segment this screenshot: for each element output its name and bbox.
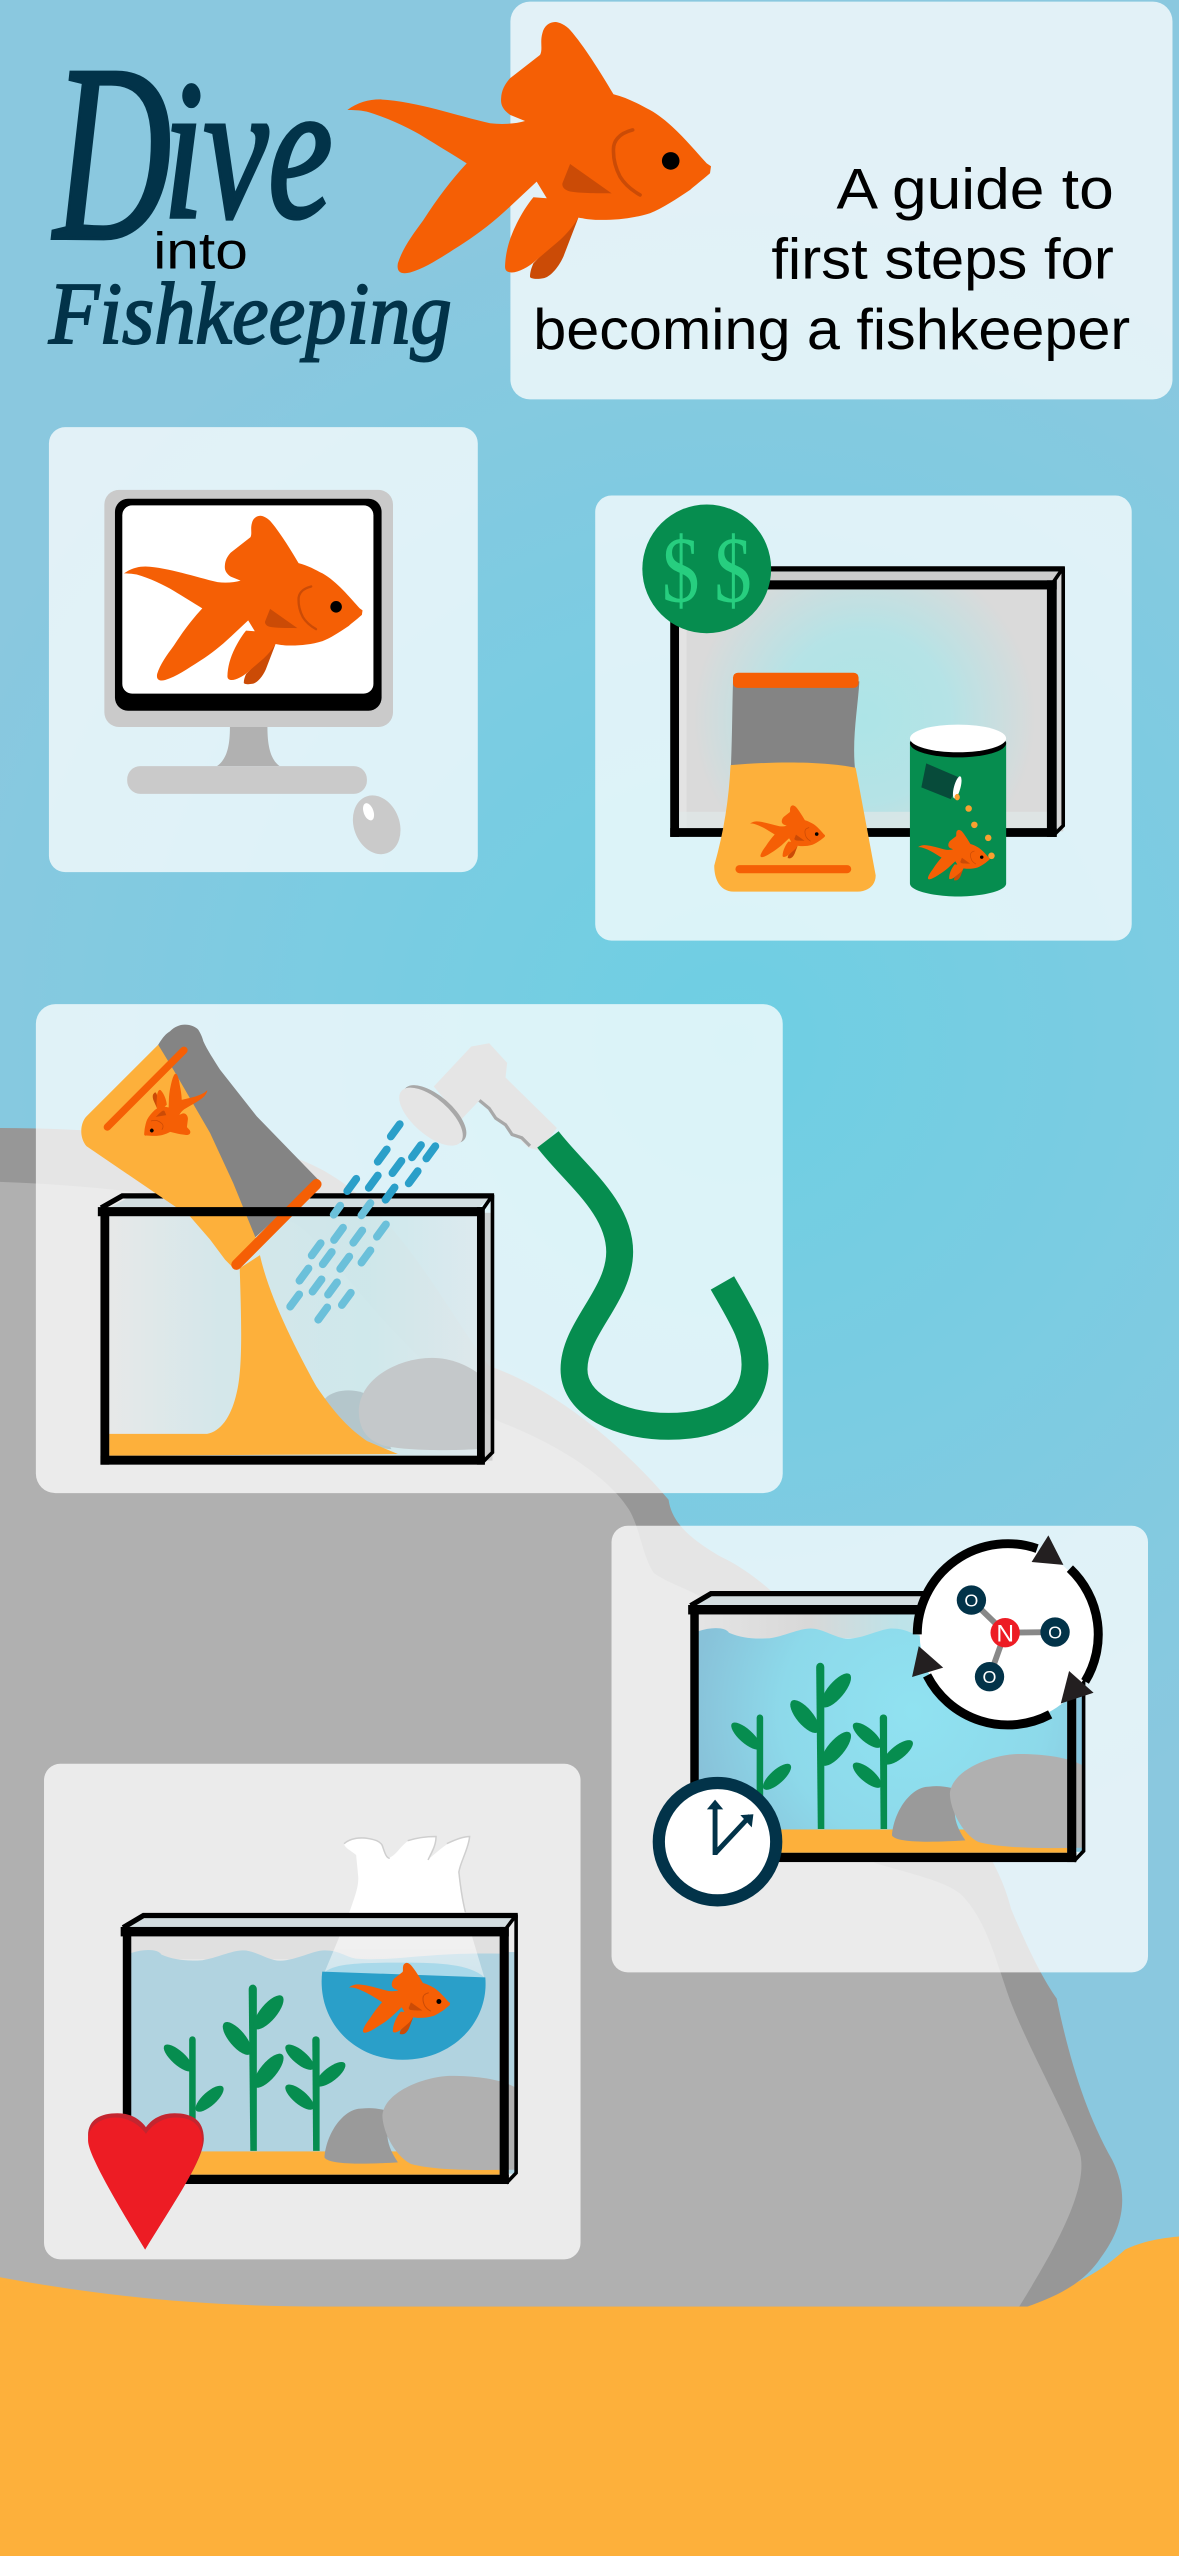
panel background: [595, 496, 1132, 941]
icon: computer: [104, 490, 408, 861]
panel background: [36, 1004, 783, 1493]
molecule: O: [1048, 1623, 1062, 1643]
title word: Dive: ive: [163, 41, 333, 261]
subtitle text: [533, 158, 1130, 362]
icon: dollar coin: $: [662, 519, 700, 623]
molecule: O: [964, 1591, 978, 1611]
fish on screen: [124, 516, 363, 684]
substrate bag tipped: [81, 1025, 318, 1268]
panel: research on computer: [49, 427, 478, 872]
sand foreground: [0, 2277, 1179, 2556]
subtitle text: A guide to: [837, 158, 1114, 222]
panel background: [612, 1526, 1148, 1972]
fish food can: [910, 725, 1006, 897]
icon: heart: [88, 2113, 204, 2250]
panel: cycle the tank: [44, 1526, 1148, 2259]
icon: dollar coin: $: [714, 519, 752, 623]
fish bag: [322, 1836, 486, 2060]
title: [48, 13, 452, 363]
panel: subtitle: [510, 2, 1172, 399]
title word: into: into: [153, 222, 248, 280]
stocked tank: [121, 1836, 518, 2184]
subtitle text: first steps for: [771, 228, 1114, 292]
panel background: [49, 427, 478, 872]
molecule: N: [996, 1621, 1014, 1648]
water spray: [290, 1124, 435, 1320]
panel: budget and supplies: [595, 496, 1132, 941]
tank glass and rocks: [101, 1195, 494, 1462]
gravel pouring: [109, 1255, 398, 1456]
tank front frame: [98, 1207, 485, 1465]
planted tank: [688, 1593, 1085, 1862]
substrate bag: [714, 673, 876, 892]
shower head: [390, 1043, 557, 1156]
empty tank: [670, 567, 1065, 837]
panel: set up the tank: [36, 1004, 783, 1493]
panel: add the fish: [44, 1764, 581, 2259]
icon: goldfish header: [347, 22, 711, 279]
subtitle text: becoming a fishkeeper: [533, 298, 1130, 362]
panel background: [44, 1764, 581, 2259]
hose: [548, 1139, 755, 1426]
title word: Dive: D: [52, 13, 171, 293]
molecule: [957, 1585, 1070, 1691]
rock back layer: [0, 1128, 1122, 2307]
icon: dollar coin: [642, 505, 771, 633]
subtitle background: [510, 2, 1172, 399]
mouse: [345, 789, 408, 861]
rock front layer: [0, 1182, 1081, 2307]
sand floor: [0, 2236, 1179, 2556]
molecule: O: [983, 1667, 997, 1687]
icon: nitrate cycle: [659, 1535, 1098, 1900]
icon: clock: [659, 1783, 776, 1900]
title word: Fishkeeping: Fishkeeping: [48, 266, 452, 363]
